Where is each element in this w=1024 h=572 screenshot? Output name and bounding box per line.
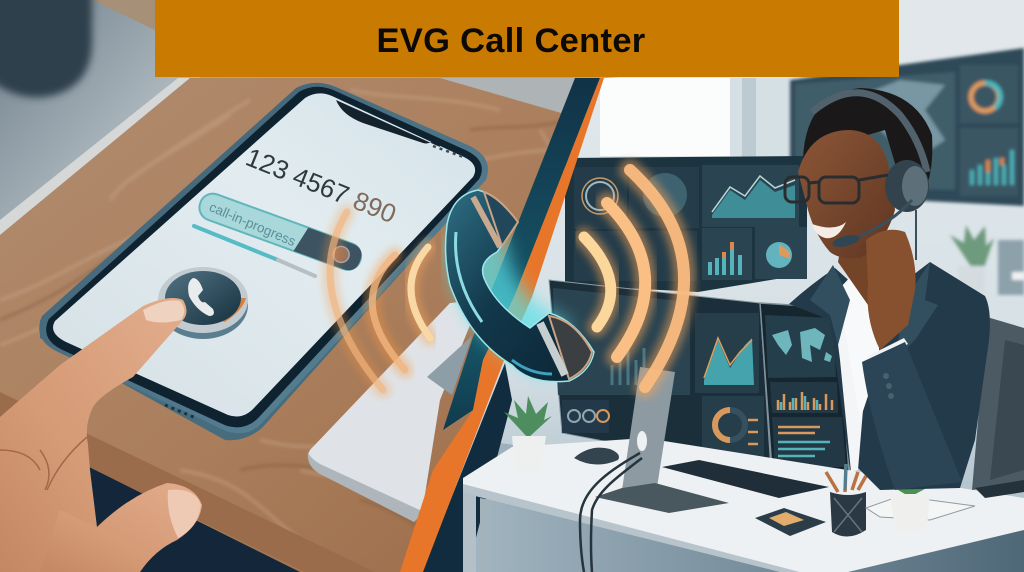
call-in-progress pill: [196, 190, 365, 274]
laptop under the signal waves: [308, 300, 480, 522]
title banner: [155, 0, 899, 77]
dialled number: 123 4567 890: [242, 142, 400, 229]
monitor stand, keyboard and mouse: [574, 367, 829, 572]
front dashboard monitors: [549, 280, 849, 472]
right background: office: [423, 0, 1024, 572]
chair: [972, 317, 1024, 498]
notepad: [866, 496, 975, 520]
speaker dots: [165, 405, 196, 418]
phone notch: [336, 100, 440, 147]
smartphone: [39, 83, 488, 440]
right orange signal waves: [584, 170, 684, 387]
agent woman with headset: [785, 88, 990, 490]
hand with fingers: [0, 298, 202, 572]
call button: [158, 267, 248, 339]
status icons: [433, 146, 466, 158]
telephone handset icon: [446, 190, 594, 382]
pen holder and tray: [755, 464, 866, 537]
call-in-progress pill: call-in-progress: [207, 199, 298, 249]
title banner: EVG Call Center: [376, 22, 646, 60]
left background: wood table and grey desk: [0, 0, 620, 572]
wall dashboard screen: [790, 48, 1024, 206]
diagonal divider: [400, 78, 604, 572]
progress bar: [194, 226, 315, 276]
desk: [463, 438, 1024, 572]
desk succulent: [888, 460, 934, 533]
left orange signal waves: [330, 212, 430, 390]
left potted plant: [504, 396, 552, 473]
back monitor wall: [565, 156, 807, 292]
background plant: [950, 225, 1024, 295]
